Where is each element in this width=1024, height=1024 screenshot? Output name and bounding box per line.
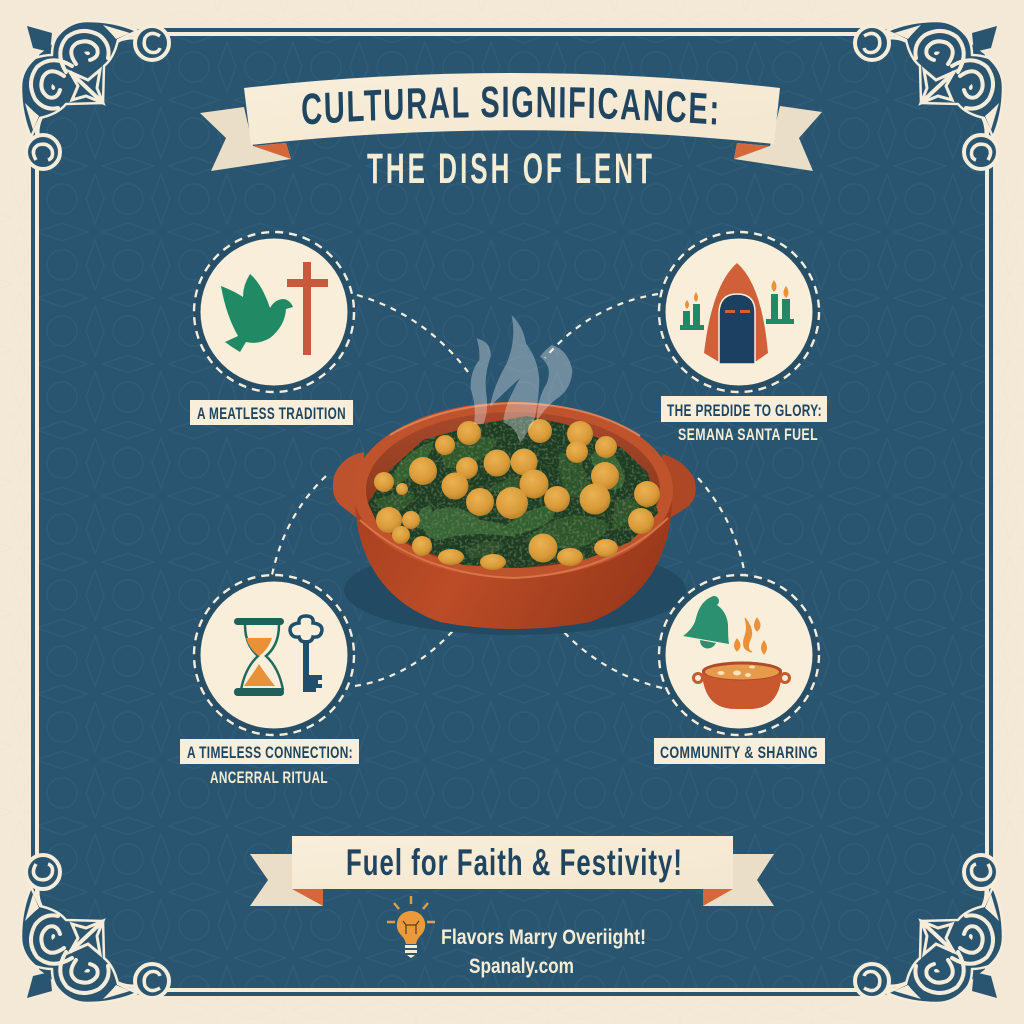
dish shadow: [344, 545, 686, 635]
title ribbon: [200, 73, 822, 171]
tip text: Flavors Marry Overiight!: [441, 926, 646, 949]
title line one: [302, 86, 717, 124]
icon: cross: [287, 262, 328, 355]
icon: steam flames: [734, 618, 766, 654]
label: a timeless connection: A TIMELESS CONNECTION:: [187, 743, 353, 762]
icon: right candles: [766, 294, 794, 324]
caption: semana santa fuel: SEMANA SANTA FUEL: [678, 425, 818, 444]
icon: light bulb: [387, 896, 435, 958]
icon: dove: [221, 274, 293, 352]
spinach: [368, 416, 658, 568]
icon: left candles: [680, 304, 704, 330]
badge: meatless tradition: [194, 232, 354, 392]
bowl handles: [333, 452, 364, 522]
label: community and sharing: [654, 738, 825, 764]
website: Spanaly.com: [469, 955, 574, 978]
badge: community and sharing: [659, 575, 819, 735]
icon: stew pot: [694, 662, 790, 709]
dashed connectors: [272, 294, 745, 688]
bottom ribbon: [250, 836, 774, 906]
badge: prelude to glory: [659, 232, 819, 392]
steam: [471, 315, 572, 443]
central dish: [333, 315, 696, 635]
label: a meatless tradition: [190, 400, 353, 425]
label: a meatless tradition: A MEATLESS TRADITION: [197, 404, 346, 423]
title line one: CULTURAL SIGNIFICANCE:: [302, 86, 717, 124]
label: community and sharing: COMMUNITY & SHARING: [660, 743, 818, 762]
chickpeas: [374, 419, 660, 570]
caption: ancestral ritual: ANCERRAL RITUAL: [210, 768, 328, 787]
icon: hourglass: [234, 618, 284, 696]
bowl body: [355, 500, 672, 629]
title line two: THE DISH OF LENT: [367, 145, 655, 193]
label: a timeless connection: [180, 739, 359, 764]
badge: timeless connection: [194, 575, 354, 735]
icon: key: [290, 616, 322, 692]
label: the prelude to glory: [661, 396, 827, 422]
ribbon text: Fuel for Faith & Festivity!: [346, 842, 683, 883]
icon: bell: [683, 596, 729, 648]
icon: nazareno hood: [704, 263, 768, 362]
label: the prelude to glory: THE PREDIDE TO GLORY:: [667, 401, 822, 420]
